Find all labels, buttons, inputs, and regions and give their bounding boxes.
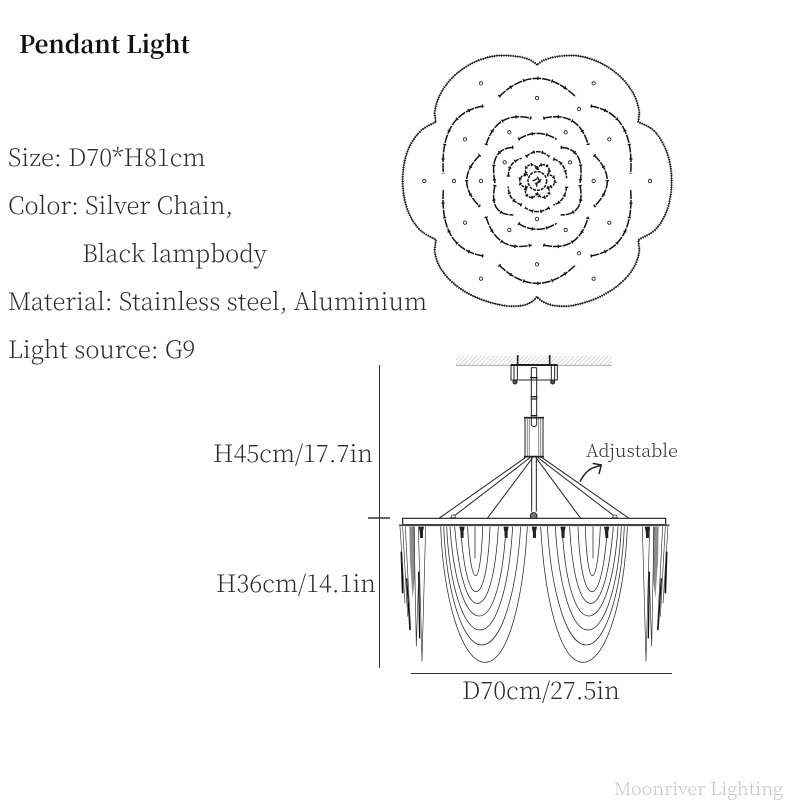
chain ring ticks (443, 78, 631, 283)
height dimension line (368, 365, 390, 668)
width dimension line (411, 672, 672, 674)
spec: color: Color: Silver Chain, (8, 186, 233, 221)
chain tassels, left (400, 527, 426, 662)
ring bar (399, 518, 669, 525)
label: adjustable: Adjustable (586, 437, 678, 463)
chain rings (443, 78, 631, 283)
arrow: adjustable (580, 463, 601, 482)
chain tassels, right (642, 527, 668, 662)
light sockets (419, 527, 650, 538)
title: Pendant Light (19, 25, 190, 60)
dimension: diameter: D70cm/27.5in (462, 671, 620, 706)
chain loops, left (441, 527, 527, 662)
stem cuff (524, 418, 544, 457)
spec: material: Material: Stainless steel, Aluminium (8, 282, 427, 317)
outer scalloped flower outline (403, 56, 672, 306)
spec: color line two: Black lampbody (82, 234, 267, 269)
mounting holes (423, 82, 652, 280)
spec: light source: Light source: G9 (8, 330, 195, 365)
top view of lamp (403, 56, 672, 306)
support arms (439, 457, 629, 519)
stem (530, 368, 538, 417)
ceiling bracket (511, 355, 557, 384)
spec: size: Size: D70*H81cm (8, 138, 206, 173)
chain loops, right (541, 527, 627, 662)
ceiling hatch (456, 356, 612, 365)
dimension: lower height: H36cm/14.1in (216, 564, 376, 599)
dimension: upper height: H45cm/17.7in (213, 434, 373, 469)
side view of lamp (399, 355, 669, 662)
